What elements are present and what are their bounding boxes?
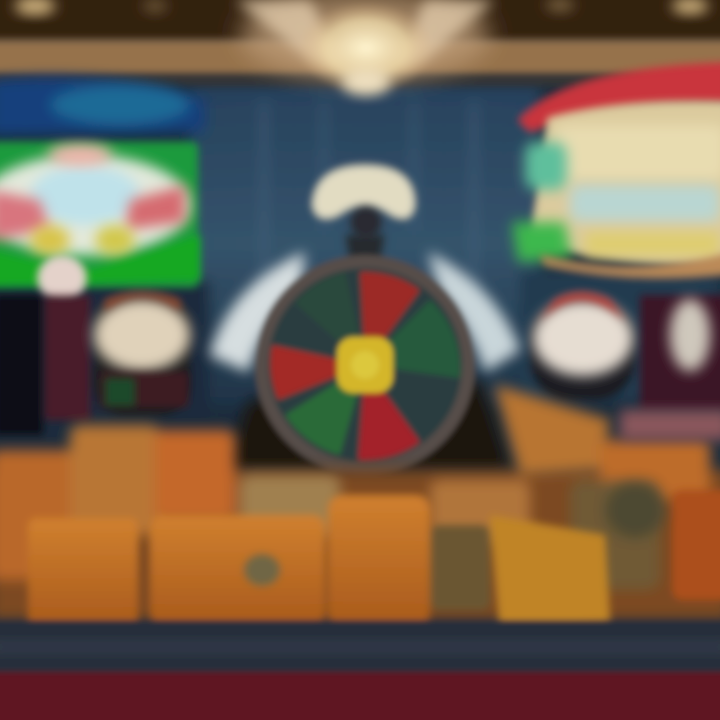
right podiums <box>530 292 720 410</box>
wheel top sign: white arch <box>312 165 415 262</box>
boxes backing <box>0 470 720 620</box>
wheel side wings <box>210 252 520 372</box>
chandelier <box>235 0 495 95</box>
right sign cream body <box>530 101 720 264</box>
left sign blue header <box>0 77 205 135</box>
back panel: blue patterned wall <box>0 85 720 410</box>
ceiling: dark band with lights and tan beam <box>0 0 720 86</box>
ceiling lights <box>15 0 708 15</box>
wheel stand <box>225 380 510 470</box>
stage table <box>0 620 720 675</box>
left sign board body <box>0 142 198 287</box>
red stage front <box>0 672 720 720</box>
wheel segments <box>360 272 420 365</box>
pink right backdrop <box>620 410 720 440</box>
right sign: game board <box>512 62 720 278</box>
back row boxes <box>0 385 710 590</box>
prize wheel <box>255 255 475 475</box>
front row boxes <box>28 490 720 632</box>
left sign: game board <box>0 77 205 300</box>
right sign red arch <box>518 62 720 132</box>
orange prize boxes <box>0 385 720 632</box>
left podiums <box>0 292 190 435</box>
wheel hub <box>337 337 393 393</box>
wheel rim <box>255 255 475 475</box>
